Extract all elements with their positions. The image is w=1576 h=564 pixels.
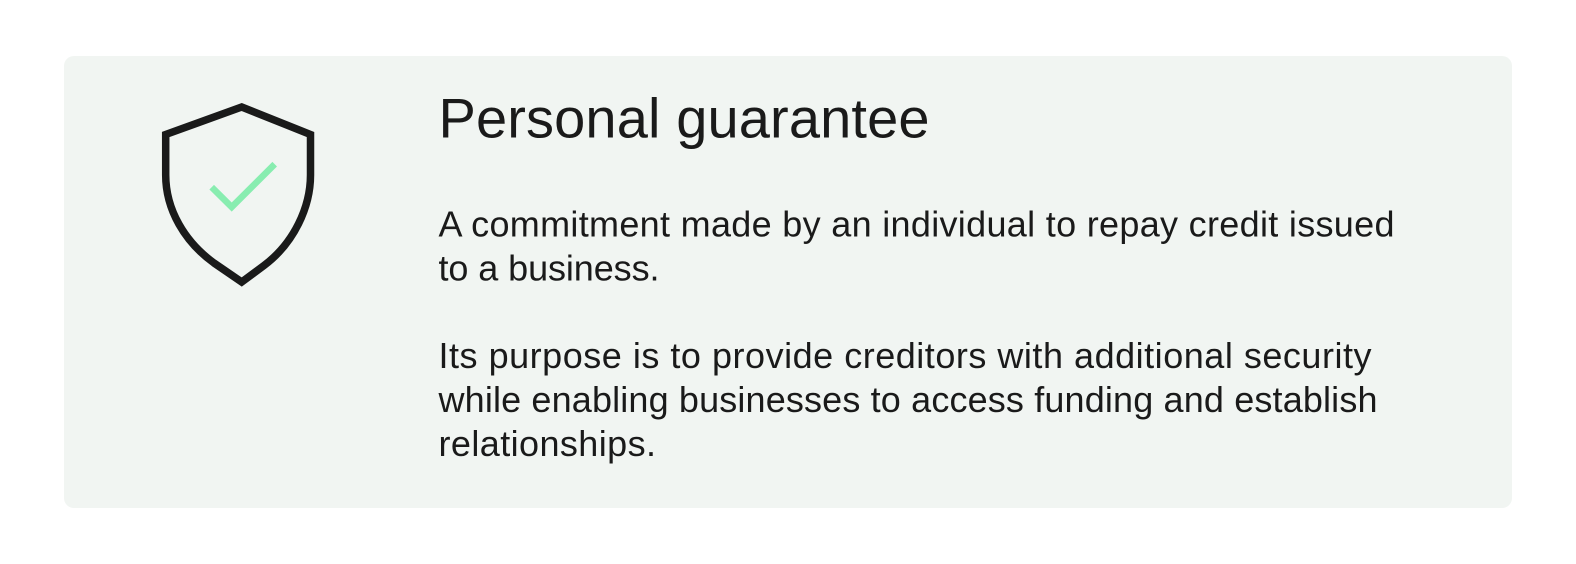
text block: definition [438,204,1394,288]
text block: purpose: Its purpose is to provide creditors with additional security [438,335,1372,376]
icon: shield with check mark [166,107,310,282]
text block: purpose: relationships. [438,423,656,464]
icon: shield outline [166,107,310,282]
text block: definition: to a business. [438,248,660,288]
icon: green check mark [212,164,275,207]
text block: purpose [438,335,1378,464]
text block: purpose: while enabling businesses to access funding and establish [438,379,1378,420]
text block: definition: A commitment made by an individual to repay credit issued [438,204,1394,244]
heading: Personal guarantee [438,87,930,150]
panel: card background [64,56,1512,508]
